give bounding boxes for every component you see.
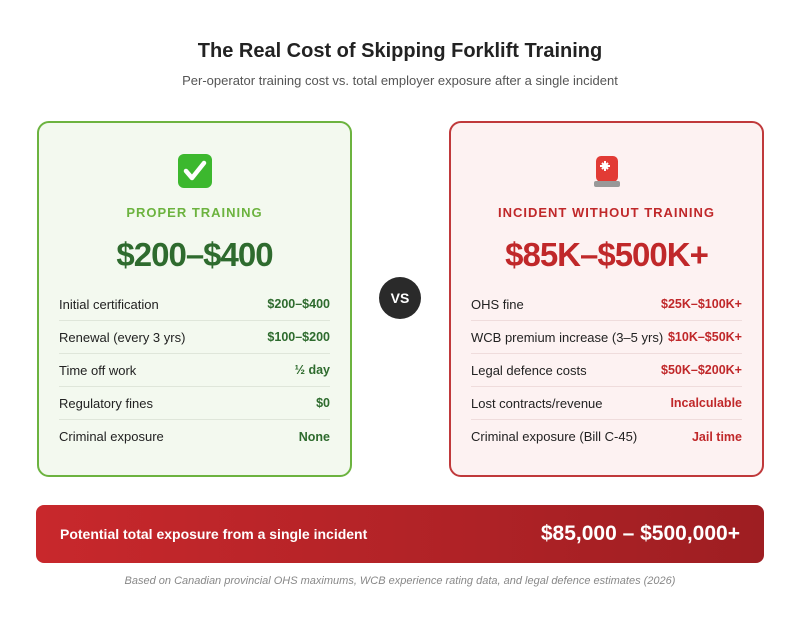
- big figure: $200–$400: [116, 236, 273, 273]
- banner: total exposure: [36, 505, 764, 563]
- cost rows: $50K–$200K+: [661, 363, 742, 377]
- cost rows: Lost contracts/revenue: [471, 396, 603, 410]
- cost rows: Jail time: [692, 430, 742, 444]
- heading: INCIDENT WITHOUT TRAINING: [498, 205, 715, 220]
- footnote: Based on Canadian provincial OHS maximums, WCB experience rating data, and legal defence estimates (2026): [125, 575, 675, 587]
- vs badge: VS: [391, 290, 409, 306]
- cost rows: $10K–$50K+: [668, 330, 742, 344]
- cost rows: Criminal exposure (Bill C-45): [471, 429, 637, 444]
- big figure: $85K–$500K+: [505, 236, 708, 273]
- cost rows: $100–$200: [267, 330, 330, 344]
- panel: proper training: [37, 121, 352, 477]
- vs badge: [379, 277, 421, 319]
- cost rows: Legal defence costs: [471, 362, 587, 378]
- cost rows: Incalculable: [670, 396, 742, 410]
- cost rows: [59, 296, 330, 444]
- cost rows: $25K–$100K+: [661, 297, 742, 311]
- cost rows: ½ day: [295, 363, 330, 377]
- cost rows: $0: [316, 396, 330, 410]
- title: The Real Cost of Skipping Forklift Training: [198, 40, 602, 62]
- cost rows: WCB premium increase (3–5 yrs): [471, 330, 663, 344]
- cost rows: None: [299, 430, 330, 444]
- subtitle: Per-operator training cost vs. total employer exposure after a single incident: [182, 73, 618, 88]
- heading: PROPER TRAINING: [126, 205, 263, 220]
- panel: incident: [449, 121, 764, 477]
- cost rows: Criminal exposure: [59, 429, 164, 444]
- banner: total exposure: Potential total exposure from a single incident: [60, 526, 367, 542]
- cost rows: Time off work: [59, 362, 136, 378]
- cost rows: Renewal (every 3 yrs): [59, 330, 185, 344]
- icon: siren: [594, 156, 620, 187]
- cost rows: [471, 296, 742, 444]
- cost rows: OHS fine: [471, 296, 524, 312]
- cost rows: $200–$400: [267, 297, 330, 311]
- banner: total exposure: $85,000 – $500,000+: [541, 522, 740, 545]
- cost rows: Regulatory fines: [59, 396, 153, 410]
- icon: check: [178, 154, 212, 188]
- cost rows: Initial certification: [59, 296, 159, 312]
